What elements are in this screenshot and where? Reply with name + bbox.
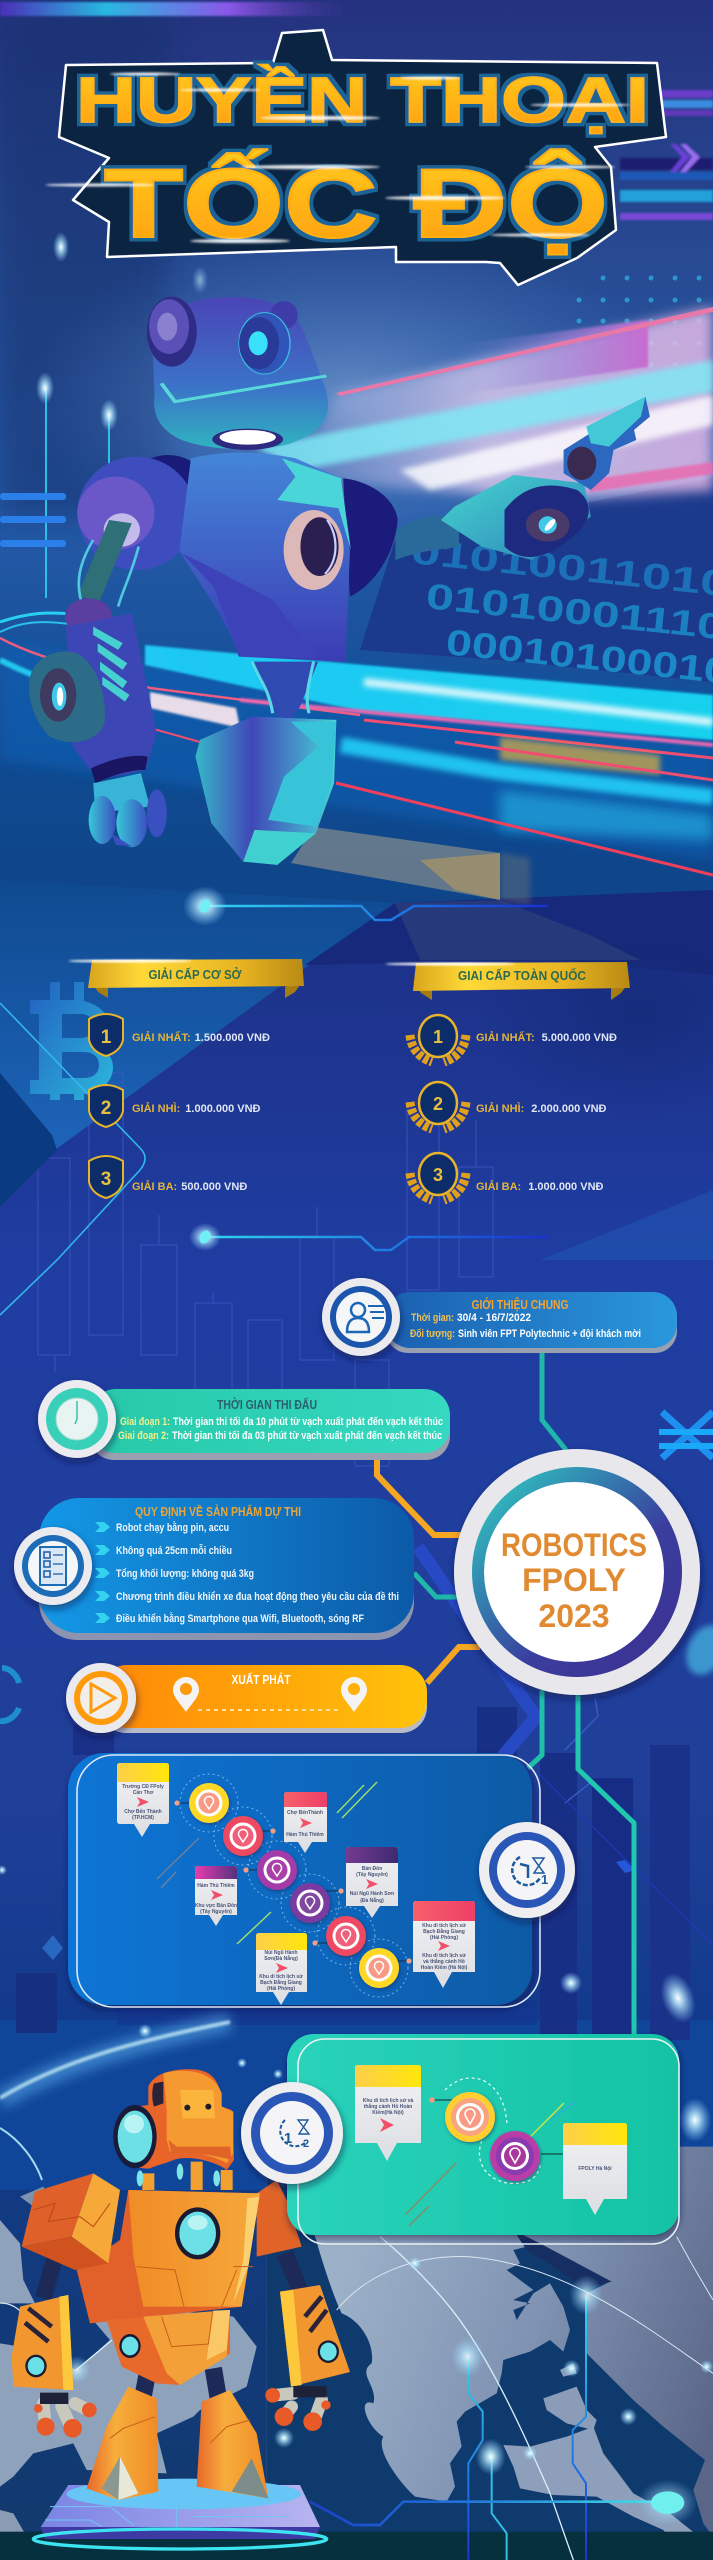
panel: xuat phat: XUẤT PHÁT	[232, 1672, 291, 1687]
card 1: Trường CĐ FPoly	[122, 1784, 164, 1790]
prize row 3: GIẢI BA: 500.000 VNĐ	[132, 1180, 247, 1193]
panel: route stage 2	[287, 2034, 679, 2244]
panel: thoi gian thi dau: Thời gian thi tối đa 10 phút từ vạch xuất phát đến vạch kết thúc	[173, 1416, 443, 1428]
prize row 2: GIẢI NHÌ: 1.000.000 VNĐ	[132, 1102, 261, 1115]
icon: clock	[38, 1380, 116, 1458]
map circuit lines	[310, 2257, 713, 2560]
icon: stage 1 timer	[479, 1822, 575, 1918]
light trails road	[0, 613, 713, 960]
shield 1: 1	[101, 1027, 112, 1048]
icon: stage 2 timer: 1	[284, 2130, 292, 2147]
card 4: (Đà Nẵng)	[360, 1897, 384, 1904]
top light arc and stars	[0, 2022, 711, 2180]
banner: co so	[68, 959, 304, 998]
upper glowing circuit line	[183, 886, 548, 926]
card 2	[284, 1792, 327, 1853]
connector lines to hub	[377, 1350, 634, 2036]
route nodes	[189, 1783, 399, 1988]
binary data panel: 01010001110	[424, 575, 713, 647]
national prize row 2: GIẢI NHÌ: 2.000.000 VNĐ	[476, 1102, 607, 1115]
card 3: Hàm Thủ Thiêm	[197, 1883, 235, 1889]
binary data panel: 01010011010	[409, 530, 713, 604]
robot neck	[137, 2162, 227, 2190]
panel: gioi thieu chung: 30/4 - 16/7/2022	[457, 1312, 531, 1324]
icon: checklist	[14, 1527, 92, 1605]
lower glowing circuit line	[189, 1223, 548, 1251]
card B	[563, 2123, 627, 2215]
connectors	[429, 2097, 563, 2154]
card 6: (Hải Phòng)	[430, 1935, 458, 1941]
small lights near title	[53, 232, 208, 294]
title artwork	[45, 30, 666, 285]
banner: toan quoc	[385, 962, 630, 1000]
robot leg rods	[143, 2368, 218, 2398]
left map lights	[0, 2303, 294, 2448]
crypto symbols	[0, 982, 713, 1721]
robot arm rods	[43, 2253, 302, 2298]
accent lines	[405, 2102, 575, 2226]
robot left leg	[87, 2387, 158, 2500]
banner: toan quoc: GIAI CẤP TOÀN QUỐC	[458, 968, 587, 983]
card A: Kiếm(Hà Nội)	[372, 2109, 404, 2116]
robot left shoulder	[77, 455, 211, 570]
robot right forearm	[280, 2285, 350, 2387]
robot left shoulder	[22, 2173, 120, 2270]
accent lines	[157, 1782, 377, 1944]
robot head	[113, 2069, 234, 2170]
card 2: Chợ BếnThành	[287, 1809, 323, 1816]
card 3: Khu vực Bản Đôn	[195, 1903, 237, 1909]
panel: quy dinh san pham: Tổng khối lượng: không quá 3kg	[116, 1568, 254, 1580]
panel: gioi thieu chung: GIỚI THIỆU CHUNG	[472, 1297, 568, 1312]
card A	[355, 2065, 421, 2161]
panel: quy dinh san pham: Robot chạy bằng pin, accu	[116, 1521, 229, 1534]
icon: stage 1 timer: 1	[541, 1872, 548, 1887]
card 3	[195, 1866, 237, 1926]
hub circle: FPOLY	[522, 1562, 626, 1598]
national prize row 3: GIẢI BA: 1.000.000 VNĐ	[476, 1180, 604, 1193]
icon: coin arc	[0, 1668, 19, 1721]
dashed route	[198, 1709, 342, 1711]
card 4: Bản Đôn	[362, 1866, 382, 1872]
section background: candlestick chart outlines	[38, 1073, 493, 1466]
icon: person	[322, 1278, 400, 1356]
light accents between panels	[0, 1619, 713, 2028]
title glints	[45, 72, 630, 243]
card 3: (Tây Nguyên)	[200, 1909, 232, 1915]
thin cyan outline	[0, 1003, 145, 1315]
shield 1	[89, 1014, 123, 1056]
icon: stage 2 timer	[241, 2082, 343, 2184]
panel: thoi gian thi dau: THỜI GIAN THI ĐẤU	[217, 1397, 317, 1412]
light streaks upper	[255, 307, 713, 500]
card 5: Núi Ngũ Hành	[264, 1950, 298, 1956]
robot torso back	[343, 478, 398, 597]
panel: xuat phat	[66, 1663, 427, 1733]
icon: stellar sign	[662, 1412, 713, 1458]
panel: gioi thieu chung: Sinh viên FPT Polytechnic + đội khách mời	[458, 1328, 641, 1340]
card 6	[413, 1901, 475, 1988]
card 4: (Tây Nguyên)	[356, 1872, 388, 1878]
robot right leg	[197, 2390, 268, 2498]
card 6: và thắng cảnh Hồ	[423, 1958, 465, 1965]
card 4: Núi Ngũ Hành Sơn	[350, 1891, 394, 1897]
left circuit lines	[0, 372, 118, 598]
panel: thoi gian thi dau: Thời gian thi tối đa 03 phút từ vạch xuất phát đến vạch kết thúc	[172, 1430, 442, 1442]
hub circle	[454, 1449, 700, 1695]
route nodes	[445, 2092, 540, 2181]
hub circle: 2023	[538, 1598, 610, 1634]
wreath badge 1	[410, 1015, 466, 1062]
panel: quy dinh san pham	[14, 1498, 414, 1640]
node pins	[204, 1796, 384, 1974]
dark rotated panel	[0, 1073, 57, 1207]
robot left hand	[89, 773, 167, 847]
shield 3: 3	[101, 1169, 111, 1190]
card 6: Hoàn Kiếm (Hà Nội)	[421, 1964, 468, 1971]
panel: quy dinh san pham: Không quá 25cm mỗi chiều	[116, 1544, 232, 1557]
robot base platform	[33, 2479, 327, 2549]
shield 2: 2	[101, 1098, 111, 1119]
icon: pin start	[173, 1677, 199, 1712]
node pins	[465, 2109, 520, 2163]
card 1	[117, 1763, 169, 1837]
panel: thoi gian thi dau	[38, 1380, 450, 1460]
card 2: Hàm Thủ Thiêm	[286, 1832, 324, 1838]
robot abdomen	[107, 2310, 230, 2385]
icon: pin end	[341, 1677, 367, 1712]
card 6: Khu di tích lịch sử	[422, 1953, 466, 1959]
card 5	[256, 1933, 307, 2005]
icon: stage 2 timer: 2	[303, 2138, 309, 2150]
card 1: Chợ Bến Thành	[124, 1808, 162, 1815]
panel: route stage 1	[68, 1753, 575, 2007]
card A: Khu di tích lịch sử và	[363, 2098, 414, 2104]
robot torso	[180, 453, 351, 662]
banner: co so: GIẢI CẤP CƠ SỞ	[148, 967, 242, 982]
icon: bitcoin	[30, 982, 113, 1100]
connectors	[174, 1800, 412, 1964]
title line 1: HUYỀN THOẠI	[76, 64, 649, 136]
dot grid	[576, 276, 702, 368]
card 5: Khu di tích lịch sử	[259, 1974, 303, 1980]
binary data panel: 00010100010	[444, 621, 713, 692]
robot right claw	[265, 2388, 331, 2431]
blue robot	[29, 297, 650, 865]
shield 2	[89, 1085, 123, 1127]
card 6: Bạch Đằng Giang	[423, 1928, 465, 1935]
panel: quy dinh san pham: QUY ĐỊNH VỀ SẢN PHẨM DỰ THI	[135, 1504, 301, 1519]
robot torso	[77, 2190, 260, 2323]
network arcs on map	[337, 2237, 713, 2560]
orange robot	[12, 2069, 350, 2549]
shield 3	[89, 1156, 123, 1198]
panel: thoi gian thi dau: Giai đoạn 2:	[118, 1430, 169, 1442]
world map left	[0, 2187, 300, 2560]
card 1: (TP.HCM)	[132, 1815, 154, 1821]
wreath badge 1: 1	[433, 1027, 443, 1047]
binary data panel	[360, 478, 713, 692]
icon: play	[66, 1663, 136, 1733]
card 5: Bạch Đằng Giang	[260, 1979, 302, 1986]
right side streaks near title	[620, 90, 713, 220]
robot right shoulder	[257, 2180, 302, 2257]
robot head	[147, 297, 328, 450]
robot waist and pelvis	[195, 662, 336, 865]
dashed orbit rings	[180, 1774, 408, 1997]
top speed streak	[0, 2, 350, 16]
title plate	[59, 30, 666, 285]
world map right	[267, 2147, 713, 2560]
prize row 1: GIẢI NHẤT: 1.500.000 VNĐ	[132, 1031, 270, 1044]
title line 2: TỐC ĐỘ	[104, 148, 608, 258]
hub title: ROBOTICS	[501, 1527, 647, 1563]
wreath badge 2	[410, 1082, 466, 1129]
robot right arm	[395, 397, 650, 560]
robot left arm	[29, 520, 167, 847]
card B: FPOLY Hà Nội	[578, 2166, 612, 2172]
card 5: (Hải Phòng)	[267, 1986, 295, 1992]
dashed arcs	[445, 2078, 540, 2183]
card 1: Cần Thơ	[133, 1790, 154, 1796]
card A: thắng cảnh Hồ Hoàn	[364, 2103, 412, 2110]
panel: quy dinh san pham: Chương trình điều khiển xe đua hoạt động theo yêu cầu của đề thi	[116, 1591, 399, 1603]
bullet chevrons	[95, 1522, 110, 1623]
panel: gioi thieu chung: Thời gian:	[411, 1312, 454, 1324]
panel: thoi gian thi dau: Giai đoạn 1:	[120, 1416, 170, 1428]
card 5: Sơn(Đà Nẵng)	[264, 1955, 298, 1962]
wreath badge 3: 3	[433, 1165, 443, 1185]
robot left claw	[34, 2398, 97, 2438]
card 4	[346, 1847, 398, 1918]
wreath badge 2: 2	[433, 1094, 443, 1114]
robot left forearm	[12, 2295, 73, 2390]
card 6: Khu di tích lịch sử	[422, 1923, 466, 1929]
national prize row 1: GIẢI NHẤT: 5.000.000 VNĐ	[476, 1031, 617, 1044]
panel: quy dinh san pham: Điều khiển bằng Smartphone qua Wifi, Bluetooth, sóng RF	[116, 1612, 364, 1625]
wreath badge 3	[410, 1153, 466, 1200]
panel: gioi thieu chung	[322, 1278, 677, 1356]
panel: prize tiers	[68, 959, 630, 1200]
panel: gioi thieu chung: Đối tượng:	[410, 1328, 455, 1340]
background bars and chevrons	[16, 1547, 713, 2043]
